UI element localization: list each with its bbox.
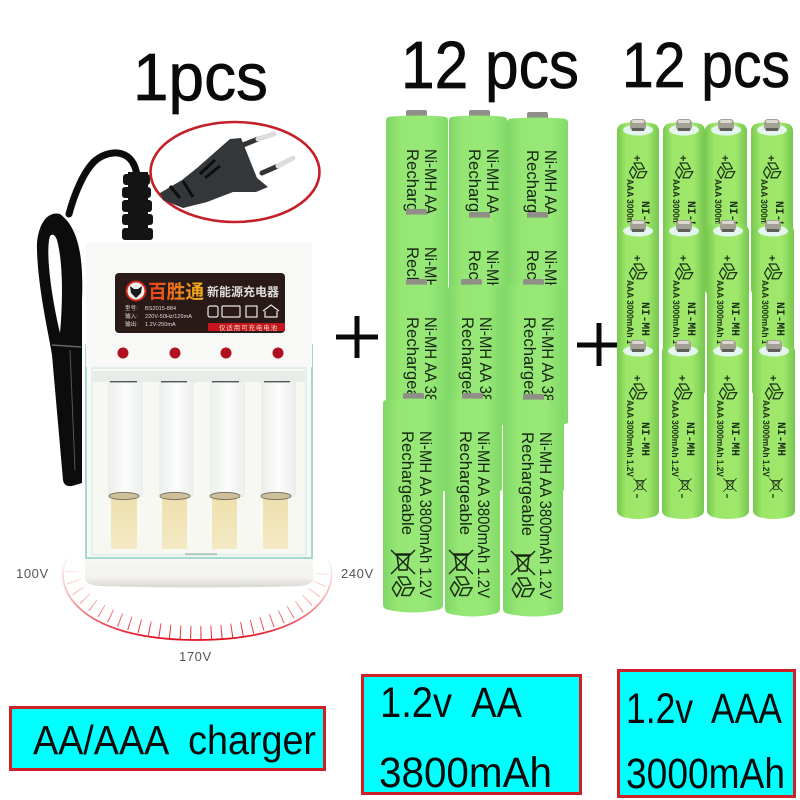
AA r4c1: Ni-MH AA 3800mAh 1.2V xyxy=(416,431,435,599)
glass case xyxy=(86,345,312,558)
title: 12 pcs AA: 12 pcs xyxy=(401,28,579,103)
callout ellipse xyxy=(150,122,320,222)
plug grip xyxy=(170,160,220,198)
plus sign 2 xyxy=(577,323,619,366)
label plate xyxy=(115,273,285,333)
AAA r1c4 xyxy=(751,119,793,298)
AA r3c2 xyxy=(448,279,502,497)
AAA r3c3 xyxy=(707,340,749,519)
spec lines: 型号: xyxy=(125,304,138,312)
AAA r1c1: AAA 3000mAh 1.2V xyxy=(624,179,635,257)
AAA r2c1: AAA 3000mAh 1.2V xyxy=(624,280,635,358)
AA r4c1 xyxy=(383,393,443,612)
AA r2c3 xyxy=(507,212,568,430)
AAA r3c4: NI-MH xyxy=(774,422,786,456)
AAA r1c3 xyxy=(705,119,747,298)
product text: 新能源充电器 xyxy=(207,284,279,299)
AA r3c1 xyxy=(386,279,447,497)
red strip: 仅适用可充电电池 xyxy=(219,323,278,332)
AAA r2c2: AAA 3000mAh 1.2V xyxy=(670,280,681,358)
spec lines: 1.2V-250mA xyxy=(145,322,176,328)
AA r4c2 xyxy=(445,393,500,616)
AA r1c3: Ni-MH AA 3800mAh 1.2V xyxy=(541,150,560,318)
AAA r2c4: AAA 3000mAh 1.2V xyxy=(759,280,770,358)
AA r4c3: Ni-MH AA 3800mAh 1.2V xyxy=(536,432,555,600)
AAA r1c1: + xyxy=(634,153,640,165)
AAA r2c2 xyxy=(663,220,705,399)
AAA r1c1: NI-MH xyxy=(638,201,650,235)
label 240V: 240V xyxy=(341,566,374,581)
AAA battery stack xyxy=(617,119,795,519)
AAA r3c1: AAA 3000mAh 1.2V xyxy=(624,400,635,478)
AAA r3c4: + xyxy=(770,373,776,385)
AAA r1c2: AAA 3000mAh 1.2V xyxy=(670,179,681,257)
spec lines: 220V-50Hz/129mA xyxy=(145,314,192,320)
dial ticks xyxy=(72,571,322,633)
AAA r2c2: + xyxy=(680,253,686,265)
AA r4c3: Rechargeable xyxy=(518,432,537,536)
AA r2c2: Ni-MH AA 3800mAh 1.2V xyxy=(483,250,502,418)
AAA r1c3: + xyxy=(722,153,728,165)
spec lines: 输出: xyxy=(125,320,138,328)
AAA r3c3: AAA 3000mAh 1.2V xyxy=(714,400,725,478)
slot 2 xyxy=(159,381,194,549)
AA r3c3 xyxy=(503,279,564,497)
voltage range dial xyxy=(16,559,374,664)
appliance icons xyxy=(208,305,279,317)
AA r4c2: Rechargeable xyxy=(456,431,475,535)
AAA r2c3: NI-MH xyxy=(728,302,740,336)
tray xyxy=(92,368,306,555)
spec box: AAA xyxy=(618,670,794,798)
AAA r1c3: NI-MH xyxy=(726,201,738,235)
red strip xyxy=(208,323,285,332)
AA r1c1: Rechargeable xyxy=(403,149,422,253)
AAA r2c1: + xyxy=(634,253,640,265)
AA r3c3: Ni-MH AA 3800mAh 1.2V xyxy=(538,317,557,485)
slot 4 xyxy=(261,381,296,549)
AA r2c1: Ni-MH AA 3800mAh 1.2V xyxy=(421,247,440,415)
AA r1c1 xyxy=(386,110,448,328)
AA r3c1: Rechargeable xyxy=(403,317,422,421)
AA battery stack xyxy=(383,110,568,616)
AAA r2c4: NI-MH xyxy=(773,302,785,336)
AAA r1c4: AAA 3000mAh 1.2V xyxy=(758,179,769,257)
spec box: charger xyxy=(10,708,324,770)
AA r3c3: Rechargeable xyxy=(520,317,539,421)
AAA r3c2: AAA 3000mAh 1.2V xyxy=(669,400,680,478)
AAA r3c3: NI-MH xyxy=(728,422,740,456)
AA r2c2: Rechargeable xyxy=(465,250,484,354)
AA r4c1: Rechargeable xyxy=(398,431,417,535)
slot 3 xyxy=(210,381,245,549)
dial arc xyxy=(63,559,332,640)
spec box: AA: 1.2v AA xyxy=(380,679,522,727)
AA r3c2: Ni-MH AA 3800mAh 1.2V xyxy=(476,317,495,485)
AA r2c3: Ni-MH AA 3800mAh 1.2V xyxy=(541,250,560,418)
AAA r3c2: NI-MH xyxy=(683,422,695,456)
charger base xyxy=(85,556,313,588)
AAA r3c4: AAA 3000mAh 1.2V xyxy=(760,400,771,478)
AA r1c2: Ni-MH AA 3800mAh 1.2V xyxy=(483,149,502,317)
AAA r2c4: + xyxy=(769,253,775,265)
AAA r1c1 xyxy=(617,119,659,298)
label 100V: 100V xyxy=(16,566,49,581)
slot 1 xyxy=(108,381,143,549)
spec box: AA xyxy=(362,676,580,797)
logo xyxy=(126,282,146,300)
AA r1c3 xyxy=(507,112,568,330)
AAA r1c2 xyxy=(663,119,705,298)
AA r2c1: Rechargeable xyxy=(403,247,422,351)
spec box: AA: 3800mAh xyxy=(379,749,552,797)
indicator LEDs xyxy=(118,348,284,358)
spec lines: BS2015-884 xyxy=(145,306,176,312)
AAA r3c4 xyxy=(753,340,795,519)
AA r4c3 xyxy=(503,394,563,616)
strain relief xyxy=(122,172,153,240)
plug pins xyxy=(243,134,293,173)
AA r1c2: Rechargeable xyxy=(465,149,484,253)
AA r1c3: Rechargeable xyxy=(523,150,542,254)
AA r3c2: Rechargeable xyxy=(458,317,477,421)
AAA r1c4: NI-MH xyxy=(772,201,784,235)
AAA r3c2 xyxy=(662,340,704,519)
spec lines: 输入: xyxy=(125,312,138,320)
AAA r2c2: NI-MH xyxy=(684,302,696,336)
AAA r2c3: + xyxy=(724,253,730,265)
power cable xyxy=(37,153,137,486)
title: 1pcs: 1pcs xyxy=(133,40,268,115)
AAA r2c3 xyxy=(707,220,749,399)
AAA r2c3: AAA 3000mAh 1.2V xyxy=(714,280,725,358)
charger top body xyxy=(86,243,312,367)
AA r1c2 xyxy=(449,110,507,328)
brand text: 百胜通 xyxy=(148,281,204,303)
spec lines xyxy=(125,304,192,328)
AAA r3c1: NI-MH xyxy=(638,422,650,456)
AAA r3c1: + xyxy=(634,373,640,385)
charger xyxy=(37,153,313,588)
AAA r3c2: + xyxy=(679,373,685,385)
AA r2c1 xyxy=(386,209,448,427)
AAA r3c1 xyxy=(617,340,659,519)
AA r1c1: Ni-MH AA 3800mAh 1.2V xyxy=(421,149,440,317)
AAA r3c3: + xyxy=(724,373,730,385)
AAA r2c1: NI-MH xyxy=(638,302,650,336)
label 170V: 170V xyxy=(179,649,212,664)
AAA r1c2: NI-MH xyxy=(684,201,696,235)
AAA r2c4 xyxy=(752,220,794,399)
plug body xyxy=(160,138,268,208)
AAA r2c1 xyxy=(617,220,659,399)
AA r2c2 xyxy=(449,212,507,430)
AAA r1c4: + xyxy=(768,153,774,165)
AA r4c2: Ni-MH AA 3800mAh 1.2V xyxy=(474,431,493,599)
AAA r1c3: AAA 3000mAh 1.2V xyxy=(712,179,723,257)
AAA r1c2: + xyxy=(680,153,686,165)
spec box: charger: AA/AAA charger xyxy=(33,717,316,763)
plus sign 1 xyxy=(336,316,378,358)
plug callout xyxy=(150,122,320,222)
AA r3c1: Ni-MH AA 3800mAh 1.2V xyxy=(421,317,440,485)
AA r2c3: Rechargeable xyxy=(523,250,542,354)
